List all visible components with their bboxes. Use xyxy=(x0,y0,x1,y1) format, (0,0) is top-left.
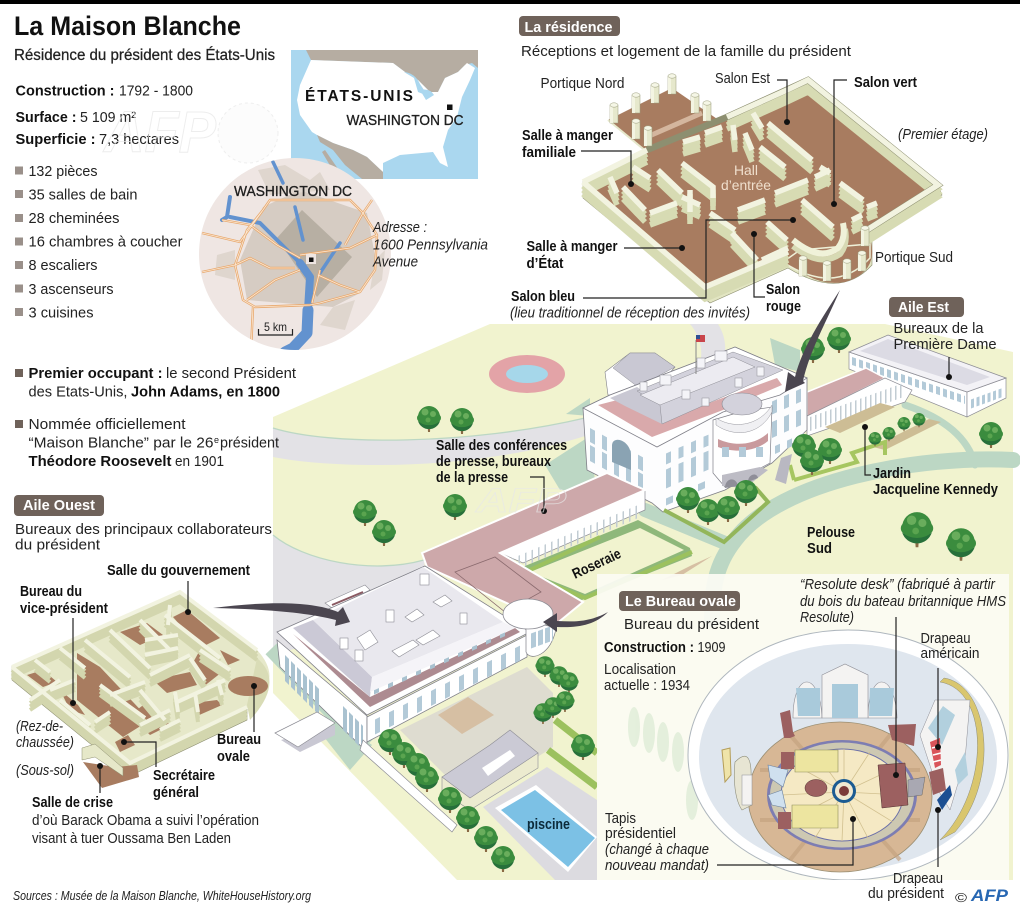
labels: west wing rooms: (Rez-de- xyxy=(16,719,63,735)
Roosevelt note: “Maison Blanche” par le 26 xyxy=(28,434,214,452)
list of rooms: 28 cheminées xyxy=(28,210,120,227)
first occupant xyxy=(15,365,297,400)
heading: Aile Est xyxy=(889,297,964,317)
west wing floor plan xyxy=(12,592,269,788)
credit: AFP xyxy=(970,886,1009,905)
text: Aile Ouest description: Bureaux des principaux collaborateurs xyxy=(15,521,272,538)
labels: west wing rooms: vice-président xyxy=(20,601,108,617)
south bow xyxy=(713,393,772,488)
walls xyxy=(583,347,807,512)
label: presidential flag: Drapeau xyxy=(893,870,943,887)
labels: residence rooms: Portique Sud xyxy=(875,249,953,266)
label: American flag: américain xyxy=(920,645,980,662)
window wall right xyxy=(920,700,970,810)
label: Resolute desk xyxy=(800,577,1006,778)
heading: La résidence: La résidence xyxy=(524,19,612,36)
oval office bump xyxy=(503,599,556,656)
labels: west wing rooms: ovale xyxy=(217,749,250,765)
map: United States xyxy=(291,50,478,179)
AFP watermark centre: AFP xyxy=(475,482,566,520)
text: Bureau ovale facts: 1909 xyxy=(698,639,726,656)
address: Adresse : xyxy=(372,219,427,236)
bowl xyxy=(688,630,1008,880)
south colonnade xyxy=(793,223,846,259)
exterior face xyxy=(583,182,942,303)
flags xyxy=(929,738,952,810)
labels: residence rooms: Salle à manger xyxy=(522,128,613,144)
text: Bureau ovale facts: actuelle : 1934 xyxy=(604,677,690,694)
labels: residence rooms: d’État xyxy=(526,255,564,272)
labels: west wing rooms: Bureau xyxy=(217,732,261,748)
key figures: 5 109 m² xyxy=(80,109,136,126)
address: 1600 Pennsylvania xyxy=(373,236,488,254)
heading: Aile Est: Aile Est xyxy=(898,299,949,316)
ghosted trees xyxy=(628,707,698,820)
label: Roseraie: Roseraie xyxy=(570,546,624,583)
label: Jacqueline Kennedy garden xyxy=(862,424,998,498)
labels: west wing rooms: chaussée) xyxy=(16,735,74,751)
desk xyxy=(878,763,925,808)
label: press briefing room: de presse, bureaux xyxy=(436,454,551,470)
labels: west wing rooms: visant à tuer Oussama Ben Laden xyxy=(32,830,231,847)
roof details xyxy=(340,574,467,661)
wall tops xyxy=(583,80,938,287)
gardens in front of residence xyxy=(664,434,842,542)
teal paths xyxy=(645,405,1013,620)
basement xyxy=(83,762,139,788)
label: American flag xyxy=(920,630,980,750)
sofas xyxy=(792,750,838,828)
text: Bureau ovale facts: Localisation xyxy=(604,661,676,678)
label: presidential carpet: présidentiel xyxy=(605,825,676,842)
list of rooms: 3 ascenseurs xyxy=(28,281,114,298)
labels: west wing rooms: Salle de crise xyxy=(32,795,113,811)
text: Bureau ovale facts: Construction : xyxy=(604,640,694,656)
residence floor plan xyxy=(583,74,942,303)
AFP watermark top: AFP xyxy=(102,100,216,165)
heading: Le Bureau ovale: Le Bureau ovale xyxy=(625,593,736,610)
Roosevelt note xyxy=(15,416,280,470)
flag xyxy=(696,335,705,374)
arrow: residence plan to building xyxy=(785,290,840,392)
north door xyxy=(612,440,631,470)
columns xyxy=(610,74,869,281)
text: résidence description: Réceptions et logement de la famille du président xyxy=(521,43,852,60)
map: Washington DC circle xyxy=(199,158,391,352)
label: press briefing room: Salle des conférences xyxy=(436,438,567,454)
labels: west wing rooms: Bureau du xyxy=(20,584,82,600)
label: États-Unis: ÉTATS-UNIS xyxy=(305,88,413,105)
rose garden xyxy=(520,520,712,600)
text: Aile Est description xyxy=(894,320,996,380)
label: presidential carpet xyxy=(605,810,856,874)
arched windows and door xyxy=(793,664,897,718)
Jacqueline Kennedy garden xyxy=(790,403,941,480)
subtitle: Résidence du président des États-Unis xyxy=(14,47,275,64)
gray driveways xyxy=(273,324,725,650)
presidential seal xyxy=(832,779,856,803)
key figures: Construction : xyxy=(16,84,114,100)
service court and pool xyxy=(378,656,597,880)
label: presidential carpet: Tapis xyxy=(605,810,636,827)
hall label: Hall xyxy=(734,162,758,178)
labels: residence rooms: Salon vert xyxy=(854,75,917,91)
key figures xyxy=(16,82,193,148)
arrow: oval office panel to building xyxy=(543,612,608,632)
label: presidential carpet: nouveau mandat) xyxy=(605,858,709,874)
label: south lawn: Sud xyxy=(807,541,832,557)
labels: residence rooms xyxy=(510,70,988,322)
list of rooms: 132 pièces xyxy=(28,163,98,180)
sources: Sources : Musée de la Maison Blanche, WhiteHouseHistory.org xyxy=(13,889,311,903)
labels: west wing rooms: général xyxy=(153,785,199,801)
key figures: 1792 - 1800 xyxy=(119,82,193,100)
labels: west wing rooms: (Sous-sol) xyxy=(16,763,74,779)
floor xyxy=(748,722,932,872)
label: American flag: Drapeau xyxy=(920,630,970,647)
first occupant: John Adams, en 1800 xyxy=(131,384,280,400)
labels: west wing rooms: Salle du gouvernement xyxy=(107,563,250,579)
north portico xyxy=(608,88,723,152)
pool xyxy=(495,785,597,872)
East colonnade xyxy=(807,368,912,436)
label: piscine: piscine xyxy=(527,817,570,833)
label: press briefing room: de la presse xyxy=(436,470,508,486)
hall label second line: d’entrée xyxy=(721,177,771,193)
heading: Aile Ouest xyxy=(14,495,104,516)
label: south lawn: Pelouse xyxy=(807,525,855,541)
Roosevelt note: Théodore Roosevelt xyxy=(28,454,172,470)
list of rooms: 8 escaliers xyxy=(28,257,98,274)
wall faces xyxy=(583,84,938,299)
west wing building xyxy=(275,566,556,832)
wall outline xyxy=(647,80,938,230)
labels: west wing rooms xyxy=(16,563,261,847)
labels: residence rooms: (lieu traditionnel de réception des invités) xyxy=(510,306,750,322)
label: Jacqueline Kennedy garden: Jacqueline Kennedy xyxy=(873,482,998,498)
top black bar xyxy=(0,0,1020,4)
list of rooms: 3 cuisines xyxy=(28,304,94,322)
Roosevelt note: président xyxy=(220,434,280,452)
awning xyxy=(281,725,335,752)
labels: west wing rooms: d’où Barack Obama a suivi l’opération xyxy=(32,812,259,829)
floor xyxy=(583,80,938,287)
table xyxy=(805,780,827,796)
north portico xyxy=(605,353,675,395)
labels: residence rooms: rouge xyxy=(766,299,801,315)
windows xyxy=(590,393,809,502)
map: Washington DC circle: 5 km xyxy=(264,320,287,334)
AFP watermark top xyxy=(102,100,278,165)
credit xyxy=(955,886,1009,905)
credit: © xyxy=(955,890,968,905)
text: Bureau ovale facts xyxy=(604,616,760,694)
side armchairs xyxy=(768,752,794,829)
fountain xyxy=(489,355,565,393)
labels: residence rooms: (Premier étage) xyxy=(898,127,988,143)
cornice and roof xyxy=(583,347,807,447)
south portico floor xyxy=(783,244,870,278)
labels: residence rooms: Salon Est xyxy=(715,70,771,87)
first occupant: des Etats-Unis, xyxy=(28,384,128,400)
list of rooms xyxy=(15,163,182,322)
East wing xyxy=(849,335,1006,417)
text: Aile Ouest description xyxy=(15,521,272,554)
label: presidential carpet: (changé à chaque xyxy=(605,842,709,858)
rug xyxy=(767,740,917,850)
main residence xyxy=(583,335,809,512)
labels: residence rooms: Salon bleu xyxy=(511,289,575,305)
list of rooms: 35 salles de bain xyxy=(28,186,138,204)
label: press briefing room xyxy=(436,438,567,514)
trees on lawns xyxy=(353,327,1003,561)
labels: west wing rooms: Secrétaire xyxy=(153,768,215,784)
press wing xyxy=(422,473,645,625)
key figures: Superficie : xyxy=(16,132,96,148)
dormers xyxy=(640,351,764,406)
heading: Aile Ouest: Aile Ouest xyxy=(23,497,95,514)
labels: residence rooms: familiale xyxy=(522,145,576,161)
scale bar xyxy=(258,329,292,335)
key figures: 7,3 hectares xyxy=(99,131,179,148)
Roosevelt note: en 1901 xyxy=(175,453,224,470)
clock and chest xyxy=(780,710,916,746)
list of rooms: 16 chambres à coucher xyxy=(28,234,182,250)
text: Aile Est description: Première Dame xyxy=(894,336,996,353)
label: Resolute desk: Resolute) xyxy=(800,610,854,626)
text: Aile Ouest description: du président xyxy=(15,536,101,554)
label: Resolute desk: “Resolute desk” (fabriqué à partir xyxy=(800,577,996,593)
key figures: Surface : xyxy=(16,110,76,126)
label: presidential flag xyxy=(868,807,945,902)
arrow: west wing plan to building xyxy=(213,603,350,626)
label: Washington DC city: WASHINGTON DC xyxy=(234,184,352,200)
first occupant: Premier occupant : xyxy=(28,366,162,382)
stairs xyxy=(775,454,792,484)
label: presidential flag: du président xyxy=(868,885,945,902)
label: Washington DC: WASHINGTON DC xyxy=(346,113,464,129)
Roosevelt note: e xyxy=(214,435,219,445)
panel: Oval Office xyxy=(597,574,1009,880)
long wall xyxy=(360,740,457,832)
text: Bureau ovale facts: Bureau du président xyxy=(624,616,760,633)
Roosevelt note: Nommée officiellement xyxy=(28,416,186,433)
labels: residence rooms: Salle à manger xyxy=(526,239,618,255)
labels: residence rooms: Salon xyxy=(766,282,800,298)
fireplace xyxy=(722,748,752,810)
label: south lawn xyxy=(807,525,855,557)
title: La Maison Blanche xyxy=(14,11,241,41)
label: Jacqueline Kennedy garden: Jardin xyxy=(873,466,911,482)
curved yellow wall xyxy=(940,678,984,840)
site plan: grounds xyxy=(272,324,1013,880)
address: Avenue xyxy=(372,254,418,270)
text: Aile Est description: Bureaux de la xyxy=(894,320,984,337)
first occupant: le second Président xyxy=(166,365,297,382)
pool house xyxy=(442,753,538,810)
address xyxy=(372,219,488,270)
labels: residence rooms: Portique Nord xyxy=(540,75,624,92)
